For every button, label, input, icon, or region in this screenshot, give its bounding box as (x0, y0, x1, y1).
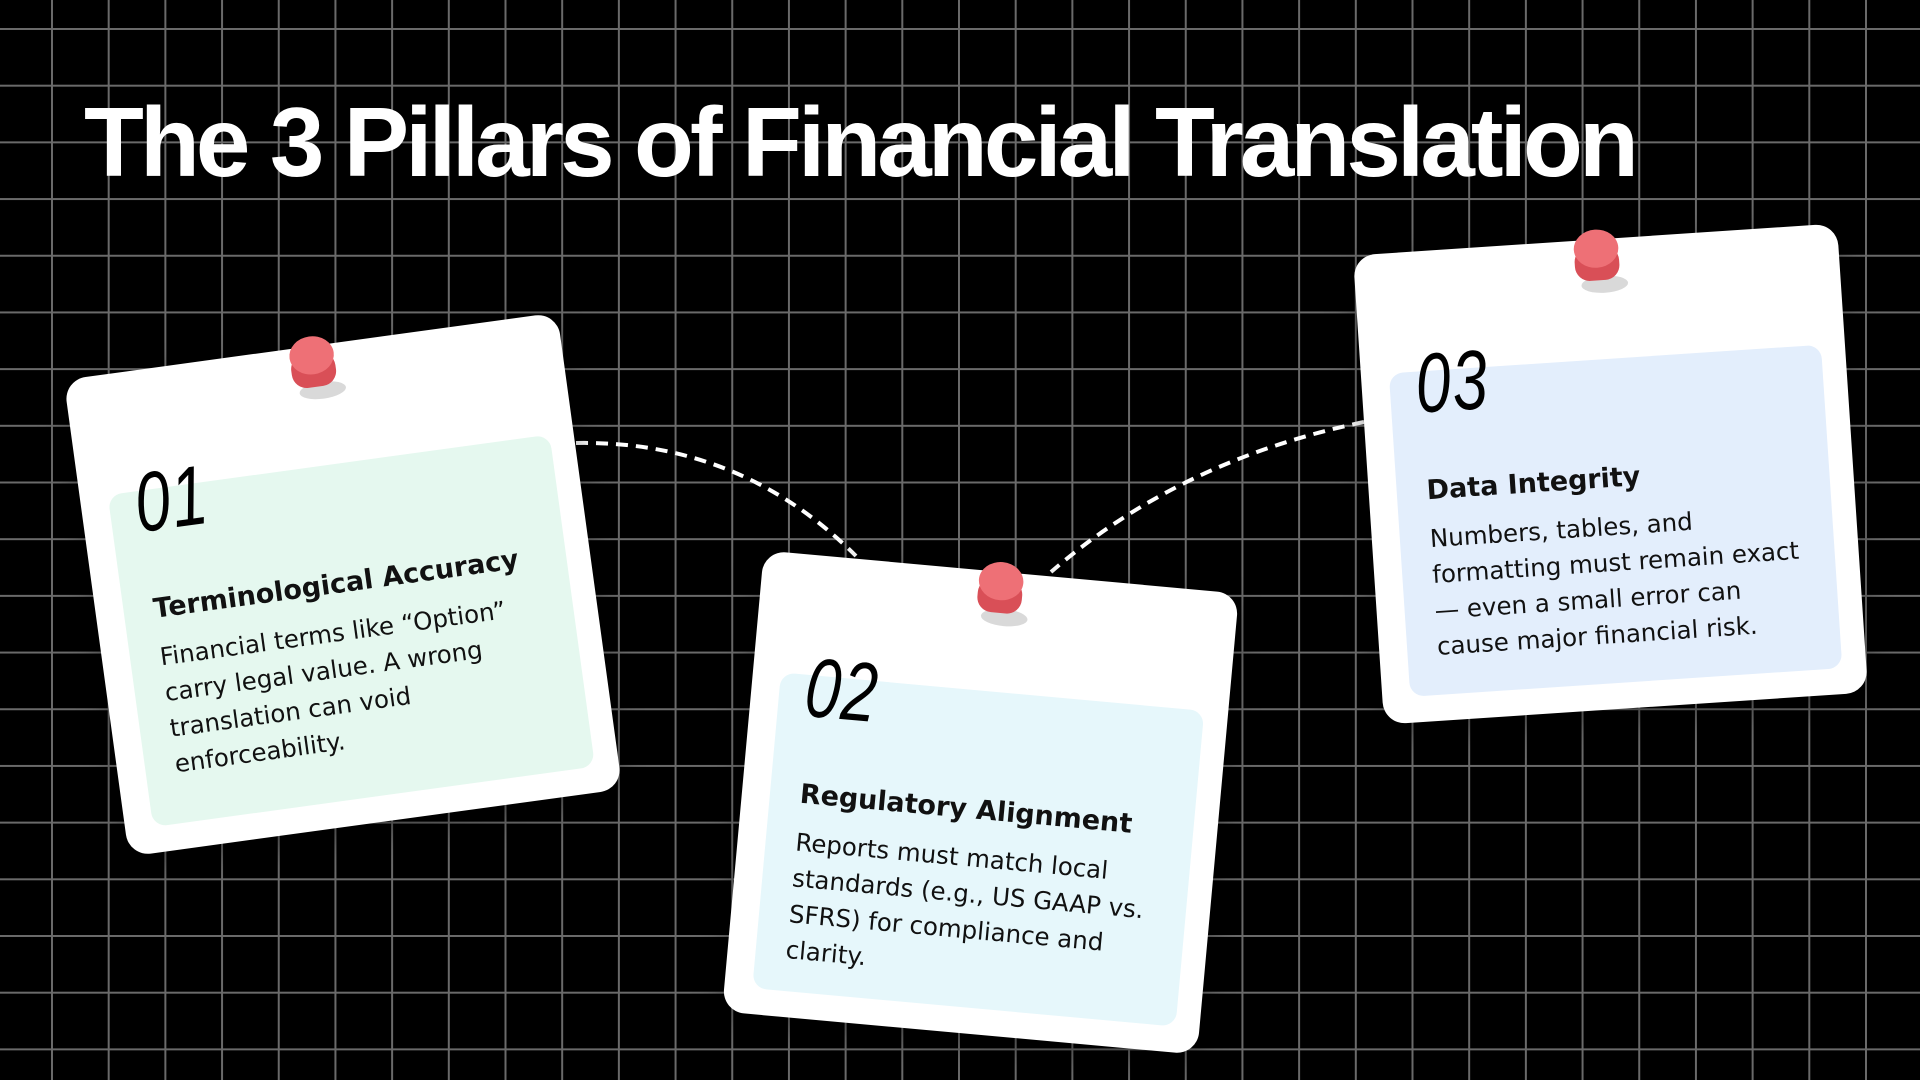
body: Reports must match local standards (e.g., US GAAP vs. SFRS) for compliance and clarity. (785, 827, 1145, 971)
number 03: 03 (1412, 332, 1492, 431)
icon: pin 2 (977, 562, 1028, 626)
body: Financial terms like “Option” carry legal value. A wrong translation can void enforceability. (158, 595, 507, 778)
panel: card 03 (1353, 223, 1868, 725)
icon: pin 3 (1574, 230, 1628, 293)
heading: Regulatory Alignment (799, 779, 1133, 840)
heading: Terminological Accuracy (152, 544, 520, 625)
panel: card 02 (722, 550, 1239, 1055)
body: Numbers, tables, and formatting must remain exact — even a small error can cause major financial risk. (1429, 507, 1800, 661)
number 02: 02 (802, 640, 883, 740)
heading: Data Integrity (1426, 461, 1641, 506)
panel: card 01 (64, 312, 622, 857)
number 01: 01 (129, 447, 214, 550)
title: The 3 Pillars of Financial Translation (84, 87, 1635, 197)
icon: pin 1 (290, 336, 346, 400)
